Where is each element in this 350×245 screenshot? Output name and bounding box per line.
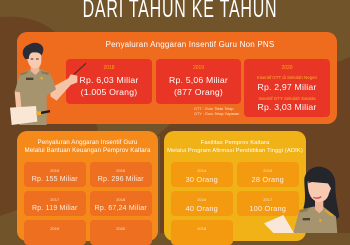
panel heading	[24, 139, 151, 154]
panel heading: Fasilitas Pemprov Kaltara	[201, 140, 269, 146]
card: 2019: 2019	[50, 226, 59, 230]
card: 2017	[237, 191, 298, 216]
card: 2015: Rp. 155 Miliar	[32, 176, 78, 182]
card: 2020: Insentif GTT di Sekolah Negeri	[257, 75, 317, 80]
card: 2015: 28 Orang	[252, 174, 284, 184]
card: 2018: Rp. 6,03 Miliar	[79, 74, 138, 84]
card: 2018	[90, 191, 152, 216]
panel: Insentif Guru Pemprov Kaltara	[17, 131, 158, 241]
card: 2019	[156, 59, 241, 104]
card: 2017	[24, 191, 86, 216]
card: 2016: 2016	[116, 168, 125, 172]
card: 2014: 2014	[197, 168, 206, 172]
card: 2018: (1.005 Orang)	[81, 87, 137, 97]
card: 2014	[171, 162, 232, 187]
card: 2018: Rp. 67,24 Miliar	[95, 204, 147, 212]
card: 2019: 2019	[193, 65, 204, 71]
card: 2020: 2020	[281, 65, 293, 71]
card: 2016: 2016	[197, 196, 206, 202]
card: 2017: 100 Orang	[249, 204, 286, 212]
legend note: GTY : Guru Tetap Yayasan	[194, 112, 239, 116]
card: 2018: 2018	[116, 196, 125, 202]
card: 2017: 2017	[50, 196, 59, 202]
panel heading: Melalui Program Afirmasi Pendidikan Tinggi (ADIK)	[167, 148, 303, 154]
card: 2017: Rp. 119 Miliar	[32, 204, 77, 212]
card: 2019	[24, 220, 86, 245]
icon: male civil servant with pointer	[10, 42, 86, 125]
card: 2018	[66, 59, 152, 104]
card: 2015: 2015	[263, 168, 272, 172]
card: 2018: 2018	[103, 65, 115, 71]
card: 2015	[237, 162, 298, 187]
legend note: GTT : Guru Tidak Tetap	[194, 107, 234, 111]
panel heading: Penyaluran Anggaran Insentif Guru Non PNS	[106, 40, 274, 49]
card: 2016	[171, 191, 232, 216]
card: 2018: 2018	[197, 226, 206, 230]
panel heading: Melalui Bantuan Keuangan Pemprov Kaltara	[24, 147, 151, 154]
card: 2020	[90, 220, 152, 245]
legend note	[194, 107, 239, 116]
panel: Penyaluran Anggaran Insentif Guru Non PNS	[17, 32, 337, 124]
card: 2020: Rp. 3,03 Miliar	[257, 102, 316, 112]
card: 2020: Rp. 2,97 Miliar	[257, 82, 316, 92]
card: 2015	[24, 162, 86, 187]
card: 2020: Insentif GTY Sekolah Swasta	[258, 96, 316, 100]
card: 2016	[90, 162, 152, 187]
panel: Fasilitas Pemprov Kaltara	[164, 131, 306, 241]
card: 2016: 40 Orang	[186, 204, 218, 212]
icon: female civil servant with paper	[264, 166, 340, 233]
panel heading: Penyaluran Anggaran Insentif Guru	[38, 139, 137, 146]
card: 2014: 30 Orang	[186, 174, 218, 184]
card: 2018	[171, 220, 232, 245]
card: 2020	[244, 59, 330, 117]
card: 2019: Rp. 5,06 Miliar	[169, 74, 228, 84]
card: 2019: (877 Orang)	[174, 87, 223, 97]
card: 2015: 2015	[50, 168, 59, 172]
card: 2020: 2020	[116, 226, 125, 230]
card: 2017: 2017	[263, 196, 272, 202]
panel heading	[167, 140, 303, 154]
card: 2016: Rp. 296 Miliar	[98, 176, 144, 182]
